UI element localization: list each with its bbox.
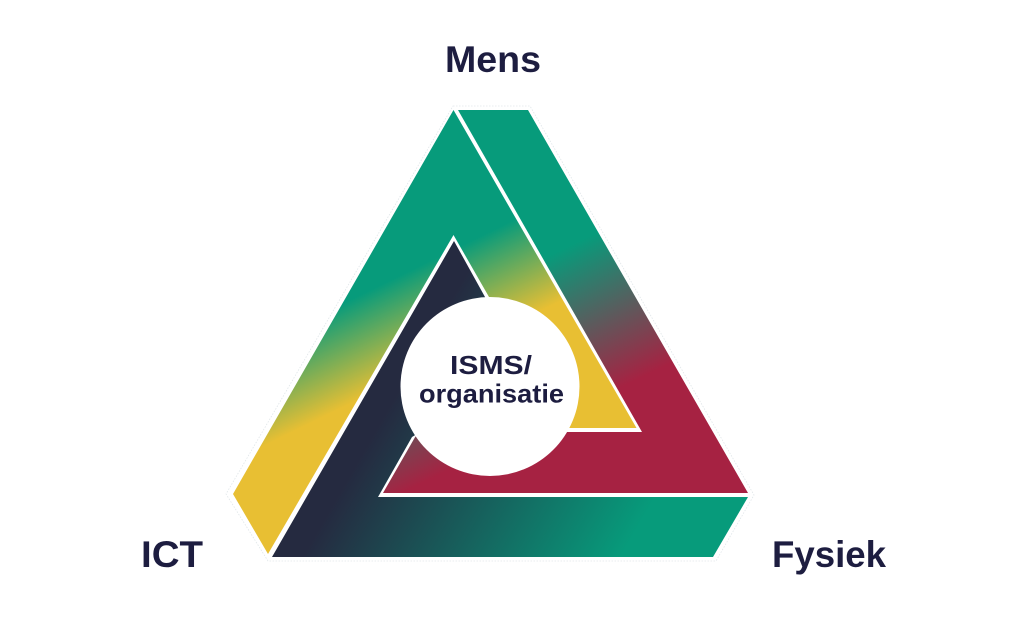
centre label: organisatie (419, 378, 564, 408)
label: ICT: ICT (141, 534, 203, 575)
centre circle (400, 297, 580, 476)
triangle segment: green to red (Mens to Fysiek side) (383, 110, 748, 493)
triangle outer outline (226, 106, 754, 561)
centre label (419, 350, 564, 408)
label: Mens: Mens (445, 39, 541, 80)
triangle segment: green to yellow (ICT side) (233, 110, 636, 554)
centre label: ISMS/ (450, 350, 532, 380)
label: Fysiek: Fysiek (772, 534, 886, 575)
triangle segment: navy to green (ICT to Fysiek side) (272, 241, 748, 557)
